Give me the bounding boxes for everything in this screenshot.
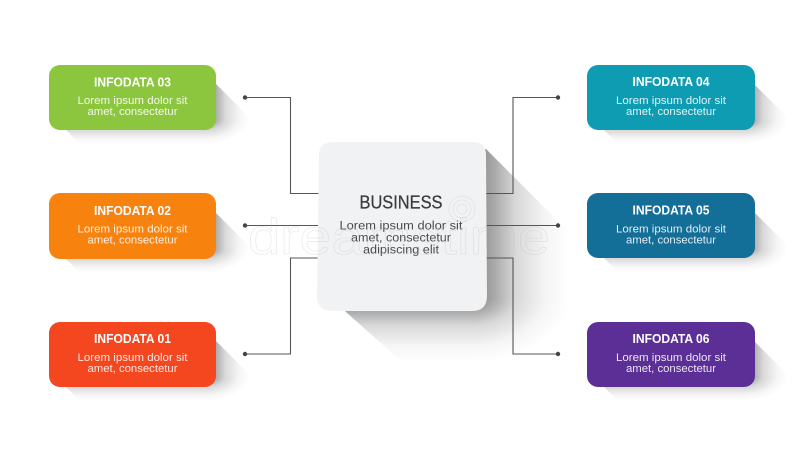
panel: infodata 04: INFODATA 04 bbox=[632, 75, 710, 89]
card shadow: infodata 05 bbox=[593, 201, 788, 272]
card shadow: infodata 02 bbox=[55, 202, 250, 273]
watermark: dreamstime bbox=[248, 209, 550, 265]
panel: infodata 03: amet, consectetur bbox=[88, 106, 178, 118]
panel: infodata 03 bbox=[49, 65, 216, 130]
card shadow: infodata 04 bbox=[593, 73, 788, 144]
panel: infodata 05: INFODATA 05 bbox=[632, 204, 710, 218]
panel: infodata 04 bbox=[587, 65, 755, 130]
text block: business description bbox=[340, 220, 463, 256]
panel: infodata 06: amet, consectetur bbox=[626, 363, 716, 375]
panel: infodata 05: Lorem ipsum dolor sit bbox=[616, 224, 726, 236]
panel: infodata 02: Lorem ipsum dolor sit bbox=[78, 224, 188, 236]
panel: infodata 03: Lorem ipsum dolor sit bbox=[78, 95, 188, 107]
long shadow: business card bbox=[328, 149, 570, 362]
panel: infodata 01: amet, consectetur bbox=[88, 363, 178, 375]
panel: infodata 03: INFODATA 03 bbox=[94, 76, 171, 90]
panel: infodata 06: Lorem ipsum dolor sit bbox=[616, 352, 726, 364]
panel: infodata 06 bbox=[587, 322, 755, 387]
card shadow: infodata 01 bbox=[55, 330, 250, 401]
panel: infodata 01: Lorem ipsum dolor sit bbox=[78, 352, 188, 364]
panel: infodata 02 bbox=[49, 193, 216, 259]
panel: infodata 05: amet, consectetur bbox=[626, 234, 716, 246]
panel: infodata 04: Lorem ipsum dolor sit bbox=[616, 95, 726, 107]
panel: infodata 05 bbox=[587, 193, 755, 258]
panel: infodata 06: INFODATA 06 bbox=[632, 332, 710, 346]
heading: business: BUSINESS bbox=[360, 192, 442, 212]
panel: infodata 04: amet, consectetur bbox=[626, 106, 716, 118]
text block: business description: adipiscing elit bbox=[363, 244, 440, 256]
panel: business card bbox=[317, 142, 487, 311]
connector lines bbox=[243, 95, 560, 356]
text block: business description: amet, consectetur bbox=[351, 232, 451, 244]
panel: infodata 01: INFODATA 01 bbox=[94, 332, 171, 346]
panel: infodata 02: amet, consectetur bbox=[88, 234, 178, 246]
text block: business description: Lorem ipsum dolor sit bbox=[340, 220, 463, 232]
panel: infodata 01 bbox=[49, 322, 216, 387]
card shadow: infodata 03 bbox=[55, 73, 250, 144]
card shadow: infodata 06 bbox=[593, 330, 788, 401]
panel: infodata 02: INFODATA 02 bbox=[94, 204, 171, 218]
